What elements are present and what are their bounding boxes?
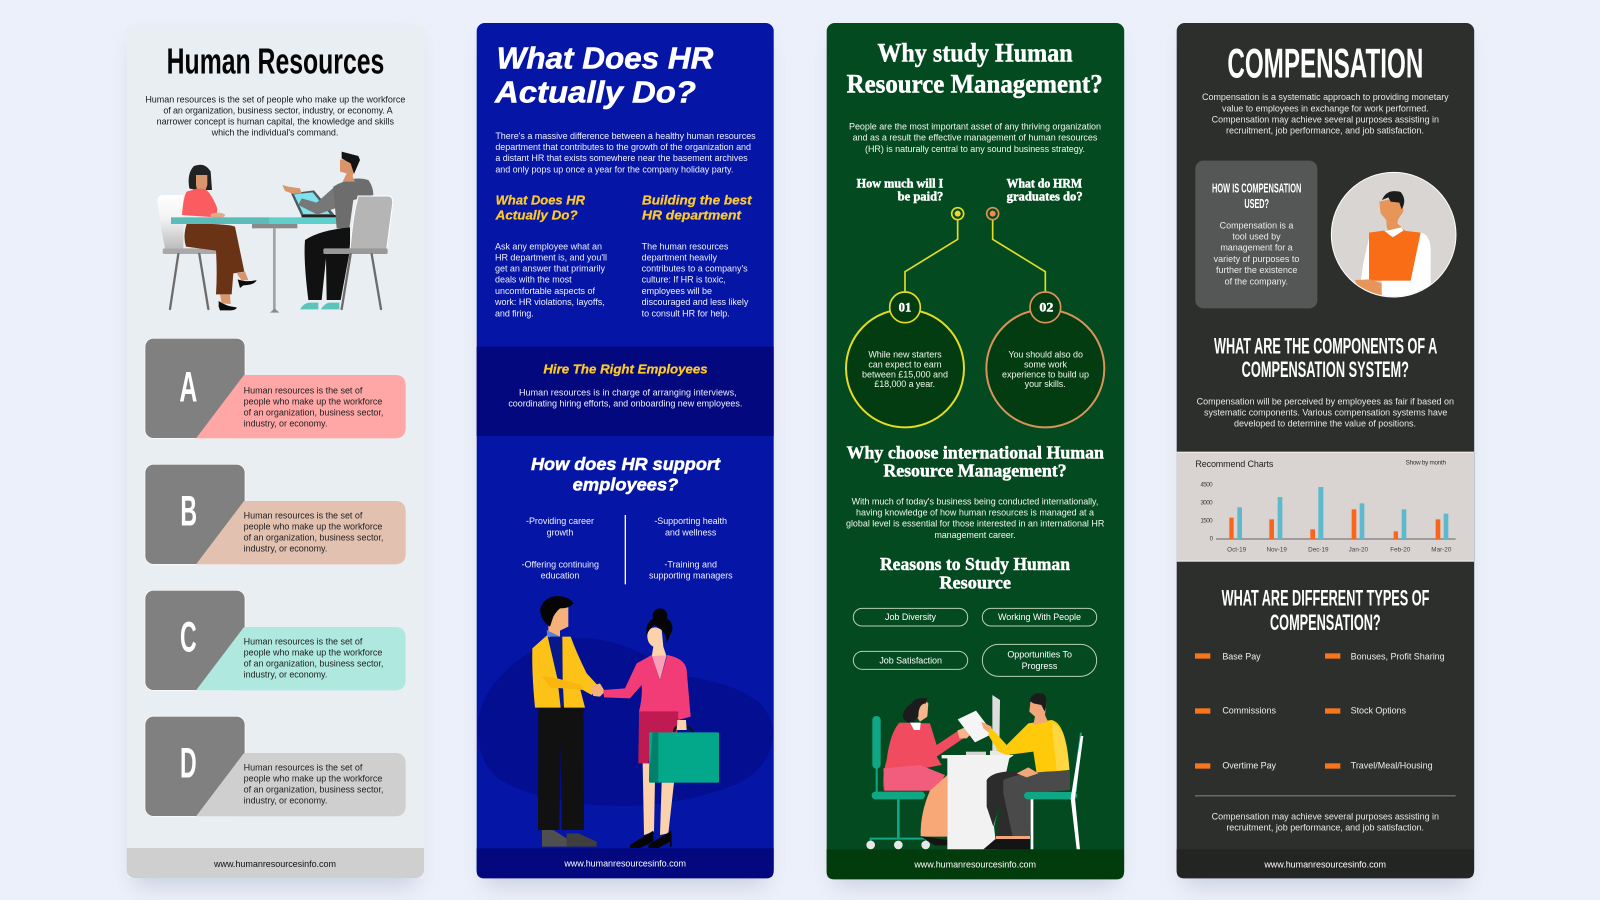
card: how is compensation used: USED? xyxy=(1244,196,1269,211)
title: why study HRM xyxy=(847,39,1103,99)
international text xyxy=(846,496,1105,540)
circle 02 xyxy=(986,292,1104,427)
title: why study HRM: Resource Management? xyxy=(847,70,1103,99)
heading: different types of compensation: COMPENSATION? xyxy=(1270,610,1381,635)
illustration: meeting at table xyxy=(157,152,393,313)
circle 01: While new starters xyxy=(868,350,942,360)
question: what do HRM graduates do: What do HRM xyxy=(1007,176,1082,190)
heading: why choose international HRM: Resource Management? xyxy=(883,461,1067,481)
connector: orange path 02 xyxy=(987,208,1045,293)
panel: compensation xyxy=(1177,23,1474,878)
card C: Human resources is the set of xyxy=(244,636,363,646)
international text: having knowledge of how human resources is managed at a xyxy=(856,507,1094,517)
title: what does HR actually do: What Does HR xyxy=(497,41,713,75)
heading: different types of compensation xyxy=(1222,586,1429,635)
panel: human resources xyxy=(127,25,424,878)
intro text: department that contributes to the growth of the organization and xyxy=(495,142,751,152)
heading: components of a compensation system: WHAT ARE THE COMPONENTS OF A xyxy=(1214,333,1437,358)
heading: how does HR support employees: employees? xyxy=(573,475,678,495)
intro text xyxy=(495,131,756,174)
card D xyxy=(145,716,406,816)
column: building the best HR department: The human resources xyxy=(642,241,729,251)
circle 02: You should also do xyxy=(1008,350,1083,360)
intro text: Human resources is the set of people who make up the workforce xyxy=(145,94,405,104)
intro text: (HR) is naturally central to any sound business strategy. xyxy=(865,144,1085,154)
support list xyxy=(522,515,733,584)
list: compensation types: Commissions xyxy=(1222,705,1276,715)
pill: job satisfaction: Job Satisfaction xyxy=(879,655,942,665)
chart band: recommend charts: Recommend Charts xyxy=(1195,459,1274,469)
card: how is compensation used: of the company. xyxy=(1225,276,1288,286)
y axis labels xyxy=(1200,482,1214,542)
card B: of an organization, business sector, xyxy=(244,533,383,543)
pill: opportunities to progress: Progress xyxy=(1022,661,1058,671)
pill: opportunities to progress xyxy=(982,644,1097,676)
heading: components of a compensation system: COMPENSATION SYSTEM? xyxy=(1242,357,1409,382)
panel: what does HR actually do xyxy=(477,23,774,878)
column: building the best HR department: Building the best xyxy=(642,193,752,207)
y axis labels: 0 xyxy=(1210,535,1214,542)
x axis labels: Jan-20 xyxy=(1349,546,1368,553)
chart band: recommend charts: Show by month xyxy=(1406,460,1446,467)
pill: job diversity xyxy=(853,608,968,626)
components text: Compensation will be perceived by employees as fair if based on xyxy=(1197,396,1454,406)
y axis labels: 3000 xyxy=(1200,500,1213,507)
title: what does HR actually do xyxy=(494,41,713,110)
support list: and wellness xyxy=(665,527,717,537)
circle 01: 01 xyxy=(899,301,911,315)
column: what does HR actually do: What Does HR xyxy=(496,193,586,207)
list: compensation types xyxy=(1195,651,1445,770)
panel: why study human resource management xyxy=(827,23,1124,879)
title: what does HR actually do: Actually Do? xyxy=(494,76,696,110)
card D: people who make up the workforce xyxy=(244,773,382,783)
title: compensation: COMPENSATION xyxy=(1227,41,1423,87)
card A: industry, or economy. xyxy=(244,419,327,429)
illustration: man in orange vest xyxy=(1331,172,1456,310)
circle 01: £18,000 a year. xyxy=(874,379,935,389)
card: how is compensation used: HOW IS COMPENSATION xyxy=(1212,180,1301,195)
card C: industry, or economy. xyxy=(244,670,327,680)
intro text xyxy=(145,94,405,137)
pill: working with people: Working With People xyxy=(998,612,1081,622)
footer bar: panel 1: www.humanresourcesinfo.com xyxy=(213,859,336,869)
illustration: two people at a desk xyxy=(866,693,1083,849)
card B: B xyxy=(180,487,197,535)
band: hire the right employees: Hire The Right Employees xyxy=(543,362,708,376)
card A: people who make up the workforce xyxy=(244,396,382,406)
x axis labels: Nov-19 xyxy=(1266,546,1287,553)
x axis labels: Dec-19 xyxy=(1308,546,1329,553)
pill: opportunities to progress: Opportunities To xyxy=(1007,650,1072,660)
card C: of an organization, business sector, xyxy=(244,659,383,669)
band: hire the right employees: Human resources is in charge of arranging interviews, xyxy=(519,387,737,397)
circle 02: some work xyxy=(1024,360,1067,370)
circle 01 xyxy=(846,292,964,427)
pill: job satisfaction xyxy=(853,651,968,669)
column: what does HR actually do: HR department is, and you'll xyxy=(495,253,607,263)
card D: of an organization, business sector, xyxy=(244,785,383,795)
footer bar: panel 1 xyxy=(127,848,424,878)
card D: Human resources is the set of xyxy=(244,762,363,772)
heading: reasons to study: Resource xyxy=(939,572,1011,592)
card C: C xyxy=(180,613,197,661)
x axis labels: Oct-19 xyxy=(1227,546,1247,553)
card B: people who make up the workforce xyxy=(244,521,382,531)
support list: -Providing career xyxy=(526,516,594,526)
column: building the best HR department: department heavily xyxy=(642,253,717,263)
card A: A xyxy=(179,363,197,411)
chart band: recommend charts xyxy=(1177,452,1474,562)
card A: of an organization, business sector, xyxy=(244,407,383,417)
connector: yellow path 01 xyxy=(905,208,964,293)
footer bar: panel 2: www.humanresourcesinfo.com xyxy=(563,859,686,869)
pill: working with people xyxy=(982,608,1097,626)
intro text: There's a massive difference between a healthy human resources xyxy=(495,131,756,141)
intro text: People are the most important asset of any thriving organization xyxy=(849,122,1101,132)
support list: education xyxy=(541,570,579,580)
components text: systematic components. Various compensation systems have xyxy=(1204,407,1447,417)
closing text: recruitment, job performance, and job satisfaction. xyxy=(1226,823,1424,833)
card A xyxy=(145,338,406,438)
band: hire the right employees: coordinating hiring efforts, and onboarding new employees. xyxy=(508,399,742,409)
circle 02: 02 xyxy=(1039,301,1053,315)
footer bar: panel 2 xyxy=(477,848,774,878)
intro text: Compensation may achieve several purposes assisting in xyxy=(1212,114,1439,124)
question: how much will I be paid: be paid? xyxy=(898,190,943,204)
card: how is compensation used: Compensation is a xyxy=(1220,220,1293,230)
intro text: Compensation is a systematic approach to providing monetary xyxy=(1202,92,1449,102)
column: what does HR actually do: Ask any employee what an xyxy=(495,241,602,251)
intro text: narrower concept is human capital, the knowledge and skills xyxy=(157,116,394,126)
column: what does HR actually do: work: HR violations, layoffs, xyxy=(494,297,605,307)
footer bar: panel 3: www.humanresourcesinfo.com xyxy=(913,859,1036,869)
support list: -Supporting health xyxy=(654,516,727,526)
card D: industry, or economy. xyxy=(244,796,327,806)
column: what does HR actually do xyxy=(494,193,607,318)
heading: how does HR support employees: How does HR support xyxy=(531,454,721,474)
support list: supporting managers xyxy=(649,570,733,580)
list: compensation types: Overtime Pay xyxy=(1222,760,1276,770)
bars xyxy=(1216,487,1456,540)
y axis labels: 4500 xyxy=(1200,482,1213,489)
x axis labels: Feb-20 xyxy=(1390,546,1411,553)
x axis labels: Mar-20 xyxy=(1431,546,1452,553)
support list: -Training and xyxy=(664,559,717,569)
intro text: and as a result the effective management of human resources xyxy=(853,133,1098,143)
intro text: and only pops up once a year for the company holiday party. xyxy=(495,164,733,174)
international text: management career. xyxy=(934,530,1016,540)
list: compensation types: Bonuses, Profit Sharing xyxy=(1351,651,1445,661)
intro text: recruitment, job performance, and job satisfaction. xyxy=(1226,125,1424,135)
card B: industry, or economy. xyxy=(244,544,327,554)
column: building the best HR department xyxy=(642,193,752,318)
card: how is compensation used: tool used by xyxy=(1232,231,1281,241)
intro text: which the individual's command. xyxy=(211,127,338,137)
support list: -Offering continuing xyxy=(522,559,599,569)
heading: different types of compensation: WHAT ARE DIFFERENT TYPES OF xyxy=(1222,586,1429,611)
column: building the best HR department: HR department xyxy=(642,208,742,222)
support list: growth xyxy=(547,527,573,537)
closing text xyxy=(1212,812,1439,833)
column: what does HR actually do: deals with the most xyxy=(495,275,572,285)
illustration: handshake xyxy=(477,596,773,848)
title: why study HRM: Why study Human xyxy=(877,39,1073,68)
list: compensation types: Stock Options xyxy=(1351,705,1406,715)
column: what does HR actually do: Actually Do? xyxy=(495,208,578,222)
question: how much will I be paid xyxy=(857,176,943,204)
card D: D xyxy=(180,739,197,787)
band: hire the right employees xyxy=(477,347,774,436)
circle 01: between £15,000 and xyxy=(862,369,948,379)
card C: people who make up the workforce xyxy=(244,647,382,657)
heading: reasons to study: Reasons to Study Human xyxy=(880,554,1070,574)
intro text xyxy=(1202,92,1449,135)
list: compensation types: Base Pay xyxy=(1222,651,1261,661)
card: how is compensation used xyxy=(1195,161,1317,308)
international text: global level is essential for those interested in an international HR xyxy=(846,519,1105,529)
footer bar: panel 4: www.humanresourcesinfo.com xyxy=(1263,859,1386,869)
card: how is compensation used: further the existence xyxy=(1216,265,1297,275)
footer bar: panel 3 xyxy=(827,849,1124,879)
question: what do HRM graduates do xyxy=(1007,176,1083,204)
list: compensation types: Travel/Meal/Housing xyxy=(1351,760,1433,770)
column: what does HR actually do: and firing. xyxy=(495,308,534,318)
international text: With much of today's business being conducted internationally, xyxy=(852,496,1098,506)
heading: reasons to study xyxy=(880,554,1070,592)
card B: Human resources is the set of xyxy=(244,510,363,520)
card: how is compensation used: variety of purposes to xyxy=(1214,254,1299,264)
question: how much will I be paid: How much will I xyxy=(857,176,943,190)
card A: Human resources is the set of xyxy=(244,385,363,395)
column: building the best HR department: discouraged and less likely xyxy=(642,297,749,307)
column: what does HR actually do: uncomfortable aspects of xyxy=(495,286,595,296)
y axis labels: 1500 xyxy=(1200,518,1213,525)
card: how is compensation used: management for a xyxy=(1220,243,1293,253)
intro text: of an organization, business sector, industry, or economy. A xyxy=(163,105,393,115)
x axis labels xyxy=(1227,546,1452,553)
intro text xyxy=(849,122,1101,154)
pill: job diversity: Job Diversity xyxy=(885,612,936,622)
column: what does HR actually do: get an answer that primarily xyxy=(495,264,605,274)
components text xyxy=(1197,396,1454,429)
heading: components of a compensation system xyxy=(1214,333,1437,382)
circle 01: can expect to earn xyxy=(868,360,942,370)
footer bar: panel 4 xyxy=(1177,849,1474,878)
column: building the best HR department: contributes to a company's xyxy=(642,264,748,274)
title: human resources: Human Resources xyxy=(167,40,384,81)
circle 02: your skills. xyxy=(1025,379,1066,389)
card C xyxy=(145,590,406,690)
circle 02: experience to build up xyxy=(1002,369,1089,379)
components text: developed to determine the value of positions. xyxy=(1234,419,1416,429)
heading: how does HR support employees xyxy=(531,454,721,495)
intro text: a distant HR that exists somewhere near the basement archives xyxy=(495,153,748,163)
question: what do HRM graduates do: graduates do? xyxy=(1007,190,1083,204)
column: building the best HR department: culture: If HR is toxic, xyxy=(642,275,726,285)
heading: why choose international HRM: Why choose international Human xyxy=(847,442,1104,462)
closing text: Compensation may achieve several purposes assisting in xyxy=(1212,812,1439,822)
card B xyxy=(145,464,406,564)
heading: why choose international HRM xyxy=(847,442,1104,481)
column: building the best HR department: to consult HR for help. xyxy=(642,308,730,318)
column: building the best HR department: employees will be xyxy=(642,286,712,296)
intro text: value to employees in exchange for work performed. xyxy=(1222,103,1429,113)
